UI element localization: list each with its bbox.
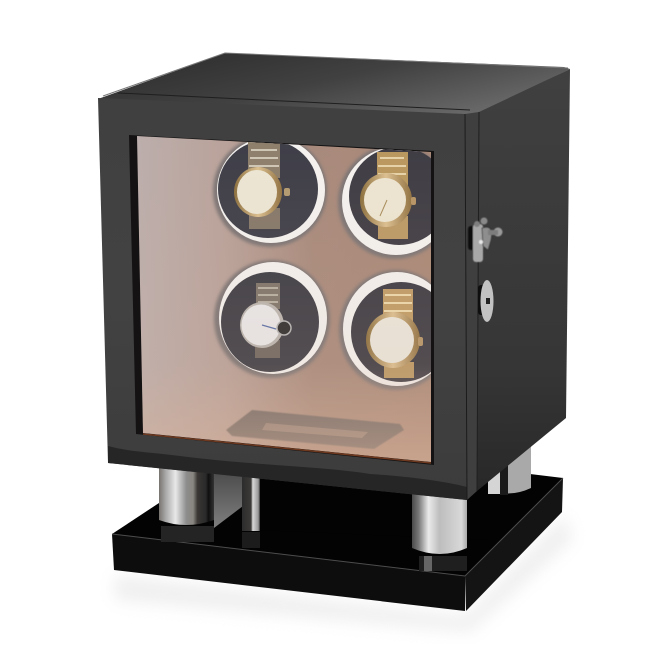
pillar: front left xyxy=(159,465,214,542)
pod: bottom right xyxy=(338,268,431,391)
illustration: four-watch winder cabinet xyxy=(98,52,570,630)
rear dark void under cabinet xyxy=(258,465,490,540)
pod: top right xyxy=(336,149,431,260)
latch xyxy=(468,218,502,262)
cabinet top xyxy=(98,53,570,116)
front frame xyxy=(98,98,467,500)
window lower copper edge xyxy=(143,434,431,463)
top edge highlight xyxy=(103,53,568,96)
frame lower gloss xyxy=(108,446,467,500)
pillar: front right xyxy=(412,490,467,571)
lid seam xyxy=(118,93,470,110)
rear panel reflection xyxy=(214,470,243,528)
pillar: back right xyxy=(488,445,531,495)
lock xyxy=(478,280,494,322)
lower glow xyxy=(142,215,431,462)
right side xyxy=(477,69,570,491)
tray xyxy=(226,410,404,449)
base plinth xyxy=(112,474,563,611)
window xyxy=(129,135,453,465)
pod: bottom left xyxy=(214,260,330,378)
pod: top left xyxy=(213,135,327,247)
pillar: back centre xyxy=(242,475,260,548)
door side strip xyxy=(465,112,479,500)
pillars xyxy=(159,445,531,571)
cabinet xyxy=(98,53,570,500)
floor shadow xyxy=(115,515,572,632)
